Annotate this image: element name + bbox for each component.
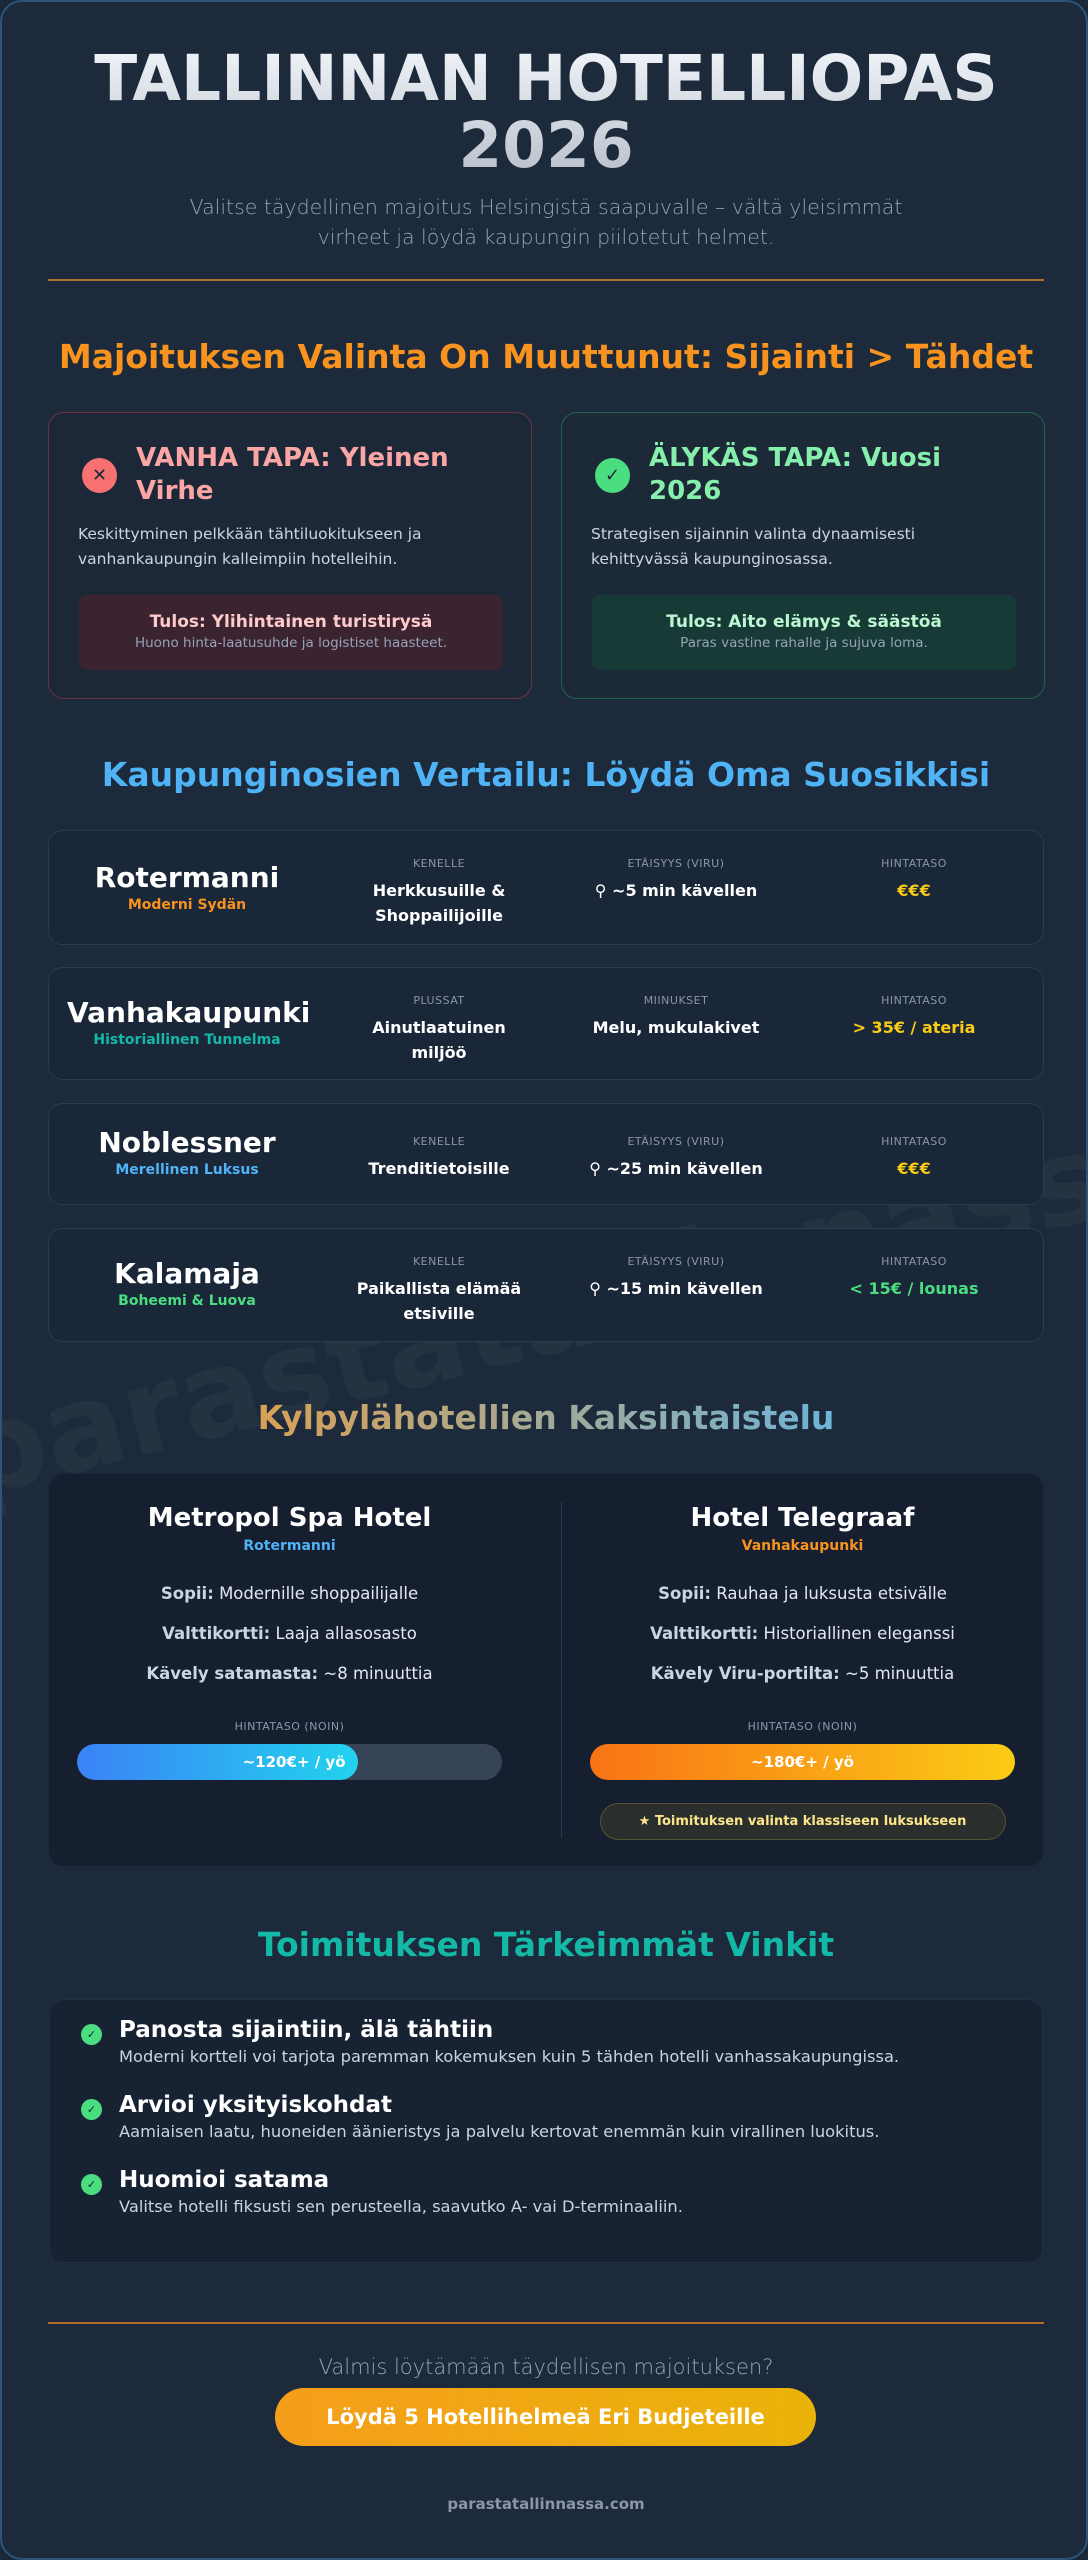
row: Vanhakaupunki: PLUSSAT bbox=[413, 994, 465, 1007]
heading: section 3: Kylpylähotellien Kaksintaistelu bbox=[258, 1398, 834, 1437]
icon: cross: ✕ bbox=[92, 465, 107, 486]
row: Noblessner: Merellinen Luksus bbox=[115, 1162, 259, 1178]
card title: ÄLYKÄS TAPA: Vuosi 2026 bbox=[649, 443, 941, 506]
row: Kalamaja: KENELLE bbox=[413, 1255, 465, 1268]
hotel: Metropol: Kävely satamasta: ~8 minuuttia bbox=[146, 1664, 433, 1683]
hotel: Telegraaf: Vanhakaupunki bbox=[742, 1538, 863, 1554]
row: Rotermanni: €€€ bbox=[897, 881, 931, 900]
heading: section 1: Majoituksen Valinta On Muuttunut: Sijainti > Tähdet bbox=[59, 337, 1033, 376]
row: Vanhakaupunki: Ainutlaatuinen miljöö bbox=[372, 1018, 506, 1062]
hotel: Metropol: Metropol Spa Hotel bbox=[148, 1503, 431, 1533]
panel: tips: Moderni kortteli voi tarjota paremman kokemuksen kuin 5 tähden hotelli vanhassakaupungissa. bbox=[119, 2047, 899, 2066]
row: Rotermanni: HINTATASO bbox=[881, 857, 947, 870]
title: TALLINNAN HOTELLIOPAS bbox=[94, 42, 998, 115]
panel: tips: Panosta sijaintiin, älä tähtiin bbox=[119, 2017, 493, 2043]
result box: Huono hinta-laatusuhde ja logistiset haasteet. bbox=[135, 635, 447, 651]
row: Vanhakaupunki: Vanhakaupunki bbox=[67, 996, 310, 1029]
card title: VANHA TAPA: Yleinen Virhe bbox=[136, 443, 449, 506]
result box: Paras vastine rahalle ja sujuva loma. bbox=[680, 635, 928, 651]
hotel: Telegraaf: Kävely Viru-portilta: ~5 minuuttia bbox=[651, 1664, 954, 1683]
price bar bbox=[77, 1744, 502, 1780]
CTA button: Löydä 5 Hotellihelmeä Eri Budjeteille bbox=[326, 2405, 765, 2429]
row: Rotermanni: Herkkusuille & Shoppailijoille bbox=[373, 881, 505, 925]
row: Kalamaja: Paikallista elämää etsiville bbox=[357, 1279, 521, 1323]
row: Vanhakaupunki: HINTATASO bbox=[881, 994, 947, 1007]
CTA button bbox=[275, 2388, 816, 2446]
panel: old way bbox=[48, 412, 532, 699]
row: Noblessner: ⚲ ~25 min kävellen bbox=[589, 1159, 763, 1178]
hotel: Metropol: Sopii: Modernille shoppailijalle bbox=[161, 1584, 418, 1603]
icon: check bbox=[595, 458, 630, 493]
subtitle: Valitse täydellinen majoitus Helsingistä saapuvalle – vältä yleisimmät virheet ja löydä kaupungin piilotetut helmet. bbox=[190, 195, 902, 249]
row: Vanhakaupunki: > 35€ / ateria bbox=[853, 1018, 975, 1037]
badge: ★ Toimituksen valinta klassiseen luksukseen bbox=[639, 1814, 966, 1829]
row: Noblessner: Trenditietoisille bbox=[368, 1159, 510, 1178]
hotel: Metropol: Rotermanni bbox=[243, 1538, 336, 1554]
panel: tips: ✓ bbox=[87, 2103, 96, 2116]
icon: check: ✓ bbox=[605, 465, 620, 486]
hotel: Telegraaf: HINTATASO (NOIN) bbox=[748, 1720, 857, 1733]
hotel: Metropol: Valttikortti: Laaja allasosasto bbox=[162, 1624, 417, 1643]
footer: parastatallinnassa.com bbox=[447, 2495, 645, 2513]
hotel: Telegraaf: Sopii: Rauhaa ja luksusta etsivälle bbox=[658, 1584, 947, 1603]
row: Kalamaja: Kalamaja bbox=[114, 1257, 260, 1290]
row: Noblessner: ETÄISYYS (VIRU) bbox=[627, 1135, 725, 1148]
panel: tips: Aamiaisen laatu, huoneiden äänieristys ja palvelu kertovat enemmän kuin virallinen luokitus. bbox=[119, 2122, 879, 2141]
row: Noblessner bbox=[48, 1103, 1044, 1205]
row: Noblessner: HINTATASO bbox=[881, 1135, 947, 1148]
CTA question: Valmis löytämään täydellisen majoituksen? bbox=[319, 2355, 773, 2379]
row: Rotermanni bbox=[48, 830, 1044, 945]
row: Noblessner: KENELLE bbox=[413, 1135, 465, 1148]
panel: tips: ✓ bbox=[87, 2178, 96, 2191]
price bar: ~120€+ / yö bbox=[243, 1753, 346, 1771]
hotel: Telegraaf: Valttikortti: Historiallinen eleganssi bbox=[650, 1624, 955, 1643]
badge bbox=[600, 1803, 1006, 1840]
result box: Tulos: Ylihintainen turistirysä bbox=[150, 612, 432, 632]
panel: tips: Arvioi yksityiskohdat bbox=[119, 2092, 392, 2118]
hotel: Telegraaf bbox=[590, 1503, 1015, 1840]
row: Rotermanni: KENELLE bbox=[413, 857, 465, 870]
row: Noblessner: Noblessner bbox=[98, 1126, 276, 1159]
panel: spa duel bbox=[49, 1474, 1043, 1866]
panel: tips: Huomioi satama bbox=[119, 2167, 329, 2193]
row: Vanhakaupunki: Melu, mukulakivet bbox=[593, 1018, 759, 1037]
result box bbox=[79, 595, 503, 670]
panel: tips: ✓ bbox=[87, 2028, 96, 2041]
row: Vanhakaupunki bbox=[48, 967, 1044, 1080]
price bar bbox=[590, 1744, 1015, 1780]
heading: section 4: Toimituksen Tärkeimmät Vinkit bbox=[258, 1925, 834, 1964]
icon: cross bbox=[82, 458, 117, 493]
row: Vanhakaupunki: MIINUKSET bbox=[644, 994, 708, 1007]
panel: tips bbox=[49, 1999, 1043, 2263]
tip 2 bbox=[81, 2092, 879, 2141]
panel: tips: Valitse hotelli fiksusti sen perusteella, saavutko A- vai D-terminaaliin. bbox=[119, 2197, 683, 2216]
row: Kalamaja: HINTATASO bbox=[881, 1255, 947, 1268]
hotel: Telegraaf: Hotel Telegraaf bbox=[691, 1503, 914, 1533]
price bar: ~180€+ / yö bbox=[751, 1753, 854, 1771]
row: Vanhakaupunki: Historiallinen Tunnelma bbox=[93, 1032, 281, 1048]
result box bbox=[592, 595, 1016, 670]
row: Rotermanni: ETÄISYYS (VIRU) bbox=[627, 857, 725, 870]
hotel: Metropol bbox=[77, 1503, 502, 1780]
row: Kalamaja: ETÄISYYS (VIRU) bbox=[627, 1255, 725, 1268]
title bbox=[2, 45, 1088, 179]
row: Rotermanni: Moderni Sydän bbox=[128, 897, 246, 913]
result box: Tulos: Aito elämys & säästöä bbox=[666, 612, 942, 632]
card text: Keskittyminen pelkkään tähtiluokitukseen ja vanhankaupungin kalleimpiin hotelleihin. bbox=[78, 525, 422, 568]
title: 2026 bbox=[458, 109, 634, 182]
row: Rotermanni: Rotermanni bbox=[95, 861, 279, 894]
heading: section 2: Kaupunginosien Vertailu: Löydä Oma Suosikkisi bbox=[102, 755, 990, 794]
row: Kalamaja: Boheemi & Luova bbox=[118, 1293, 256, 1309]
tip 1 bbox=[81, 2017, 899, 2066]
row: Kalamaja: ⚲ ~15 min kävellen bbox=[589, 1279, 763, 1298]
hotel: Metropol: HINTATASO (NOIN) bbox=[235, 1720, 344, 1733]
row: Rotermanni: ⚲ ~5 min kävellen bbox=[595, 881, 757, 900]
card text: Strategisen sijainnin valinta dynaamisesti kehittyvässä kaupunginosassa. bbox=[591, 525, 915, 568]
row: Kalamaja: < 15€ / lounas bbox=[850, 1279, 978, 1298]
panel: smart way bbox=[561, 412, 1045, 699]
row: Noblessner: €€€ bbox=[897, 1159, 931, 1178]
tip 3 bbox=[81, 2167, 683, 2216]
row: Kalamaja bbox=[48, 1228, 1044, 1342]
